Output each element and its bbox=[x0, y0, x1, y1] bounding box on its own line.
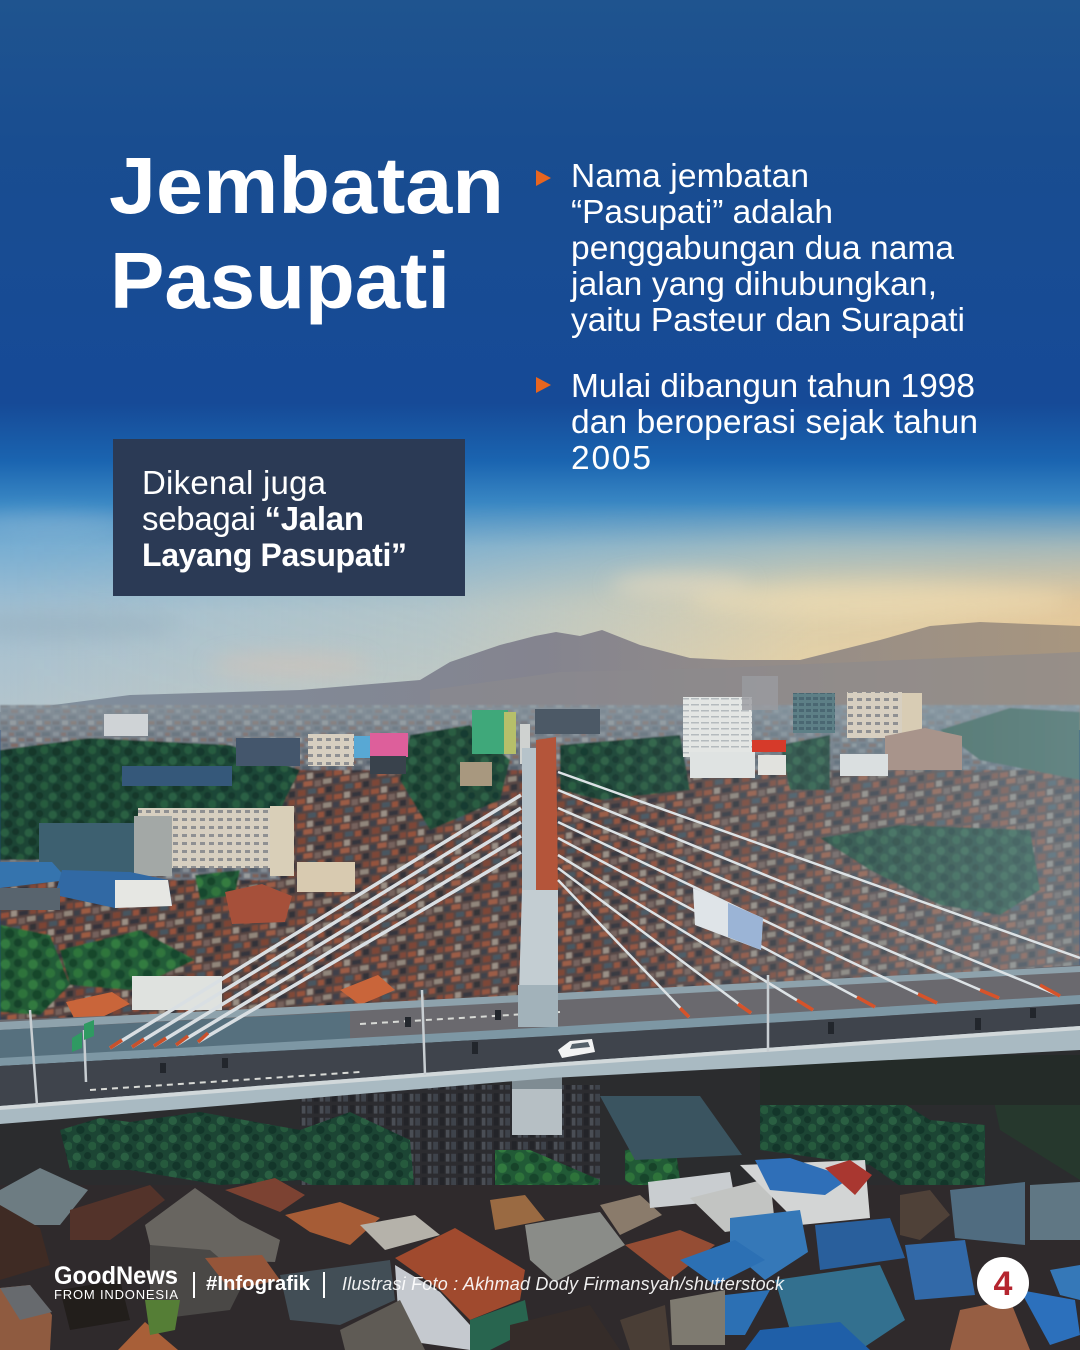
bullet 1: name origin: jalan yang dihubungkan, bbox=[570, 266, 937, 303]
page number badge: 4 bbox=[994, 1265, 1013, 1303]
bridge: lamp posts and signs bbox=[30, 888, 768, 1105]
bullet 2: construction dates: dan beroperasi sejak tahun bbox=[571, 404, 978, 441]
bullet 2: construction dates: Mulai dibangun tahun 1998 bbox=[571, 368, 975, 405]
title: Jembatan bbox=[109, 141, 504, 230]
bridge: pylon bbox=[518, 737, 558, 1027]
bullet 2: construction dates bbox=[536, 368, 978, 477]
page number badge bbox=[977, 1257, 1029, 1309]
callout: also known as bbox=[113, 439, 465, 596]
title: Pasupati bbox=[110, 236, 450, 325]
photo: ground and trees below the bridge bbox=[0, 1040, 1080, 1260]
bridge: cables left side bbox=[110, 795, 521, 1048]
callout: also known as: sebagai “Jalan bbox=[142, 500, 364, 537]
icon: orange triangle bullet bbox=[536, 170, 551, 186]
callout: also known as: Layang Pasupati” bbox=[142, 537, 407, 573]
court / flat blue rectangle bbox=[600, 1096, 742, 1160]
photo: mountains on the horizon bbox=[0, 622, 1080, 730]
bullet 1: name origin: Nama jembatan bbox=[571, 158, 809, 195]
footer: logo GoodNews: GoodNews bbox=[54, 1262, 178, 1290]
bullet 1: name origin: “Pasupati” adalah bbox=[571, 194, 833, 231]
bridge: pylon lower pier bbox=[512, 1075, 562, 1135]
photo: city background bbox=[0, 705, 1080, 1040]
footer: logo GoodNews: FROM INDONESIA bbox=[54, 1287, 178, 1302]
bridge: white car bbox=[558, 1039, 595, 1058]
photo: city buildings bbox=[0, 676, 962, 1018]
title bbox=[109, 141, 504, 325]
icon: orange triangle bullet bbox=[536, 377, 551, 393]
bridge: motorcycles bbox=[160, 1008, 1036, 1073]
photo: rooftops foreground bbox=[0, 1158, 1080, 1350]
background: blue gradient sky bbox=[0, 0, 1080, 720]
bridge: cables right side bbox=[558, 772, 1080, 1017]
bullet 1: name origin: yaitu Pasteur dan Surapati bbox=[571, 302, 965, 339]
callout: also known as: Dikenal juga bbox=[142, 464, 327, 501]
bullet 2: construction dates: 2005 bbox=[571, 440, 651, 477]
bullet 1: name origin: penggabungan dua nama bbox=[571, 230, 954, 267]
footer: logo GoodNews bbox=[54, 1262, 178, 1302]
footer: hashtag bbox=[194, 1272, 324, 1298]
footer: hashtag: #Infografik bbox=[206, 1273, 311, 1295]
footer: photo credit: Ilustrasi Foto : Akhmad Dody Firmansyah/shutterstock bbox=[342, 1274, 785, 1294]
bridge: rear and front deck bbox=[0, 965, 1080, 1124]
bullet 1: name origin bbox=[536, 158, 965, 339]
